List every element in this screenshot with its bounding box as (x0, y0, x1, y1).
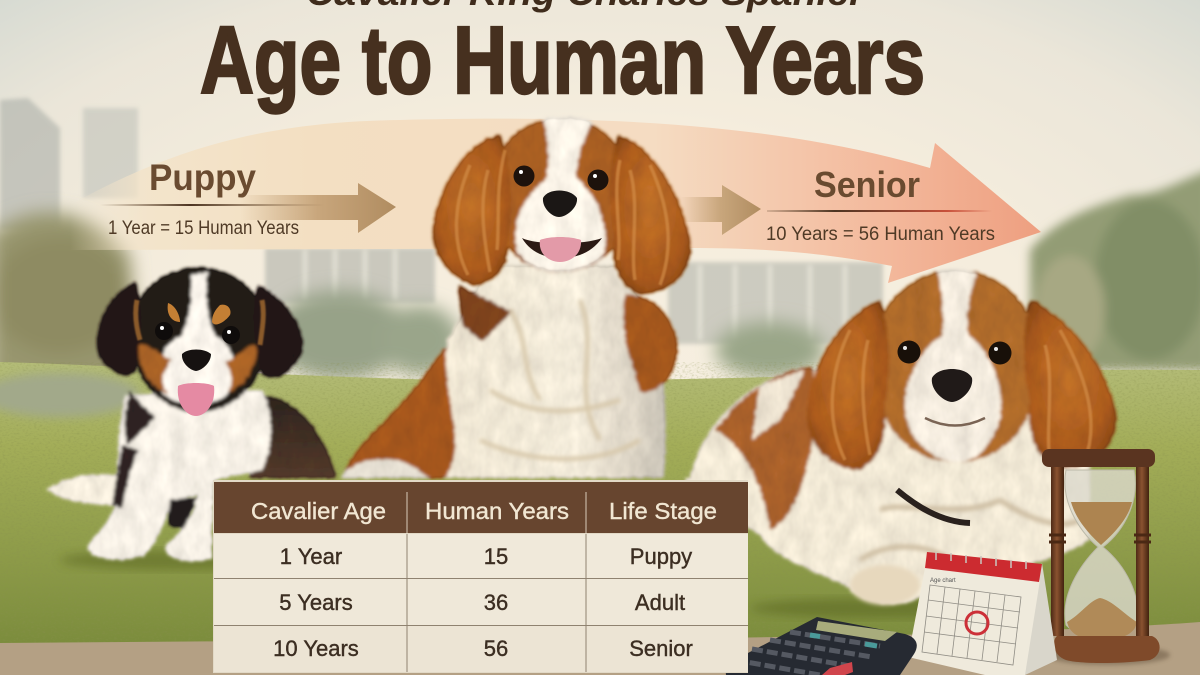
right ear (254, 285, 302, 378)
table rows text: 10 Years (273, 636, 359, 661)
calendar spiral rings (936, 552, 1026, 569)
dog: puppy (47, 268, 336, 561)
table header: Cavalier Age (251, 498, 386, 524)
calculator (725, 617, 917, 675)
table header: Human Years (425, 498, 569, 524)
hourglass frame (1051, 466, 1064, 636)
table rows text: 5 Years (279, 590, 353, 615)
calendar red circle (966, 612, 988, 634)
senior stage label: 10 Years = 56 Human Years (766, 224, 995, 245)
hourglass sand (1071, 502, 1132, 545)
calendar (908, 552, 1057, 675)
head (132, 268, 266, 412)
table header: Life Stage (609, 498, 717, 524)
puppy stage label: 1 Year = 15 Human Years (108, 218, 299, 239)
table rows text: 36 (484, 590, 508, 615)
left ear (807, 300, 889, 470)
background: right tree line (1030, 170, 1200, 370)
background: hazy buildings left (0, 98, 138, 230)
table body rows (214, 534, 748, 672)
puppy stage label: Puppy (149, 157, 256, 198)
right ear (1024, 300, 1116, 468)
senior paw (850, 565, 920, 605)
head (872, 270, 1038, 462)
table rows text (273, 544, 693, 661)
left ear (433, 135, 510, 286)
left ear (97, 282, 141, 375)
background: grass field (0, 362, 1200, 645)
curved timeline arrow band (70, 119, 1041, 283)
calendar: Age chart (930, 578, 956, 584)
calculator screen (816, 621, 897, 641)
calendar grid (922, 585, 1021, 665)
background: dirt path (0, 622, 1200, 675)
hourglass glass (1065, 470, 1138, 636)
table rows text: Senior (629, 636, 693, 661)
senior stage label (680, 164, 995, 245)
dog: adult cavalier (340, 116, 691, 478)
arrow: puppy to adult (240, 183, 396, 233)
right ear (610, 135, 691, 294)
background: hazy city centre (265, 248, 883, 344)
senior collar (897, 490, 970, 523)
table rows text: 56 (484, 636, 508, 661)
table rows text: Puppy (630, 544, 692, 569)
background: left tree line (0, 212, 825, 395)
senior stage label: Senior (814, 164, 920, 205)
calculator keys (735, 632, 880, 675)
title: Age to Human Years (200, 7, 925, 114)
age conversion table (213, 480, 748, 673)
head (492, 118, 630, 272)
arrow: adult to senior (680, 185, 761, 235)
puppy stage label (100, 157, 396, 239)
dog: senior cavalier (685, 269, 1116, 605)
table header (214, 482, 748, 533)
table rows text: 1 Year (280, 544, 342, 569)
table rows text: Adult (635, 590, 685, 615)
table rows text: 15 (484, 544, 508, 569)
hourglass (1042, 449, 1170, 665)
